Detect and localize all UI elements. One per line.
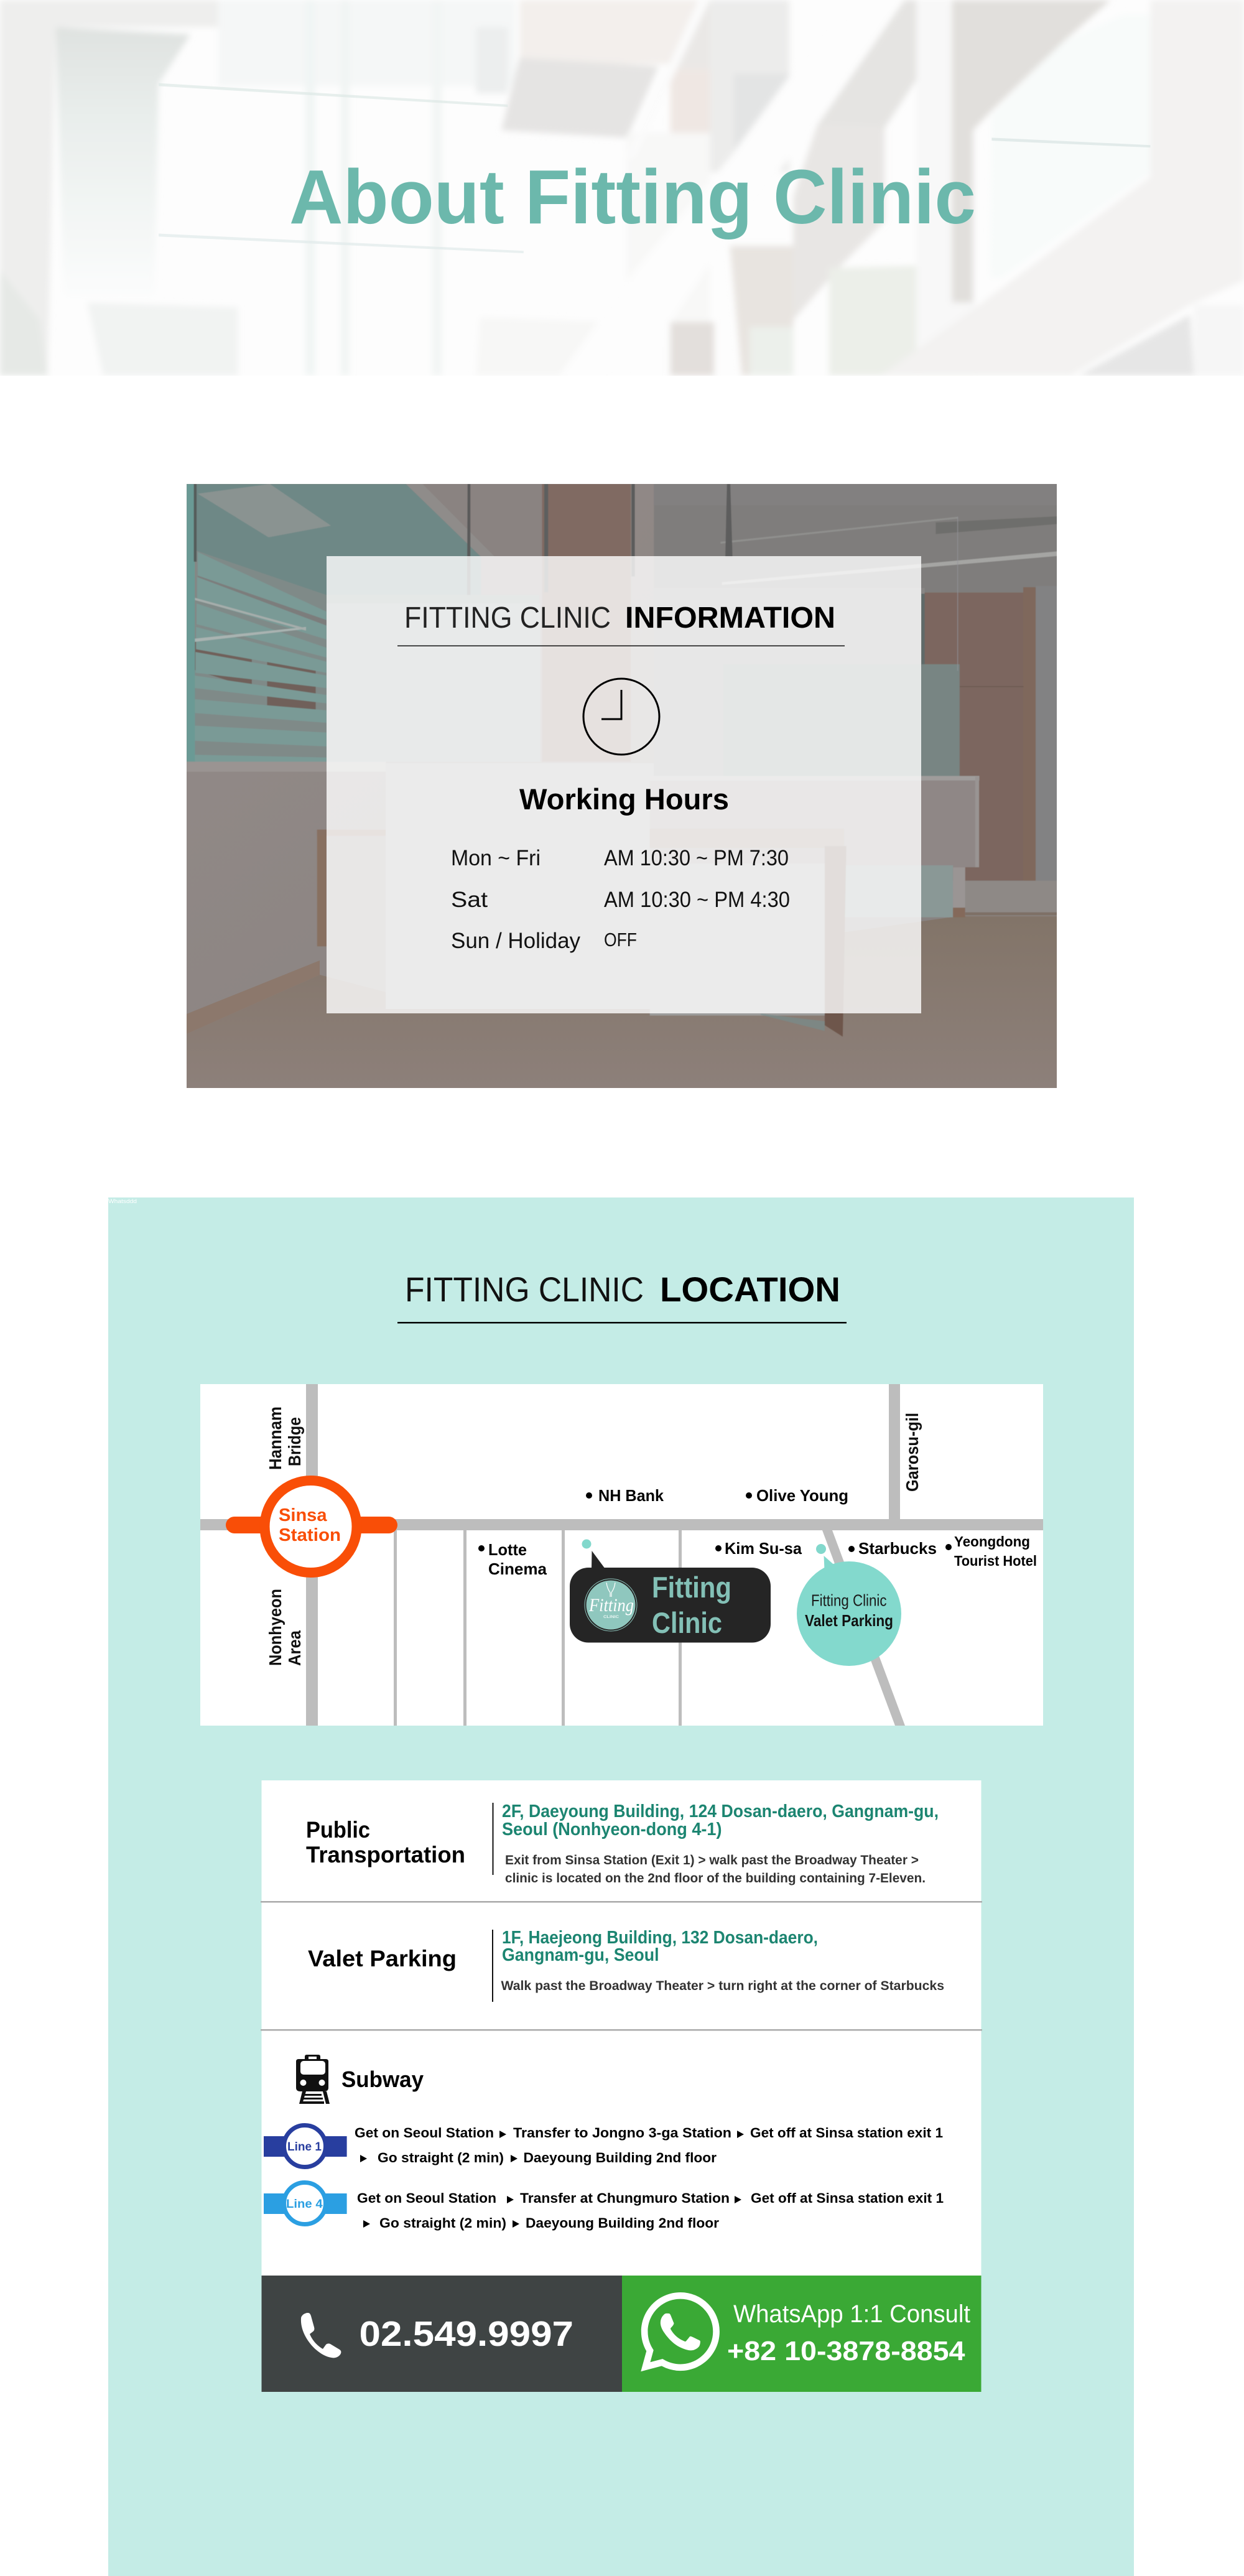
valet parking row [308,1928,944,2002]
subway section [264,2055,944,2231]
Line 4 badge: Line 4 [286,2198,323,2211]
reception photo background [187,484,1057,1088]
landmark labels: Olive Young [756,1486,848,1505]
icon: clock [583,679,659,755]
Line 1 directions: Get on Seoul Station [355,2125,494,2141]
working hours table: AM 10:30 ~ PM 4:30 [604,888,790,912]
valet parking row: Walk past the Broadway Theater > turn right at the corner of Starbucks [501,1979,944,1993]
working hours table: Sun / Holiday [451,929,580,953]
Line 4 directions: Daeyoung Building 2nd floor [526,2215,719,2231]
Line 4 directions: Go straight (2 min) [379,2215,506,2231]
public transportation row: Exit from Sinsa Station (Exit 1) > walk past the Broadway Theater > [505,1853,919,1867]
rotated road labels: Garosu-gil [903,1413,922,1492]
information heading: FITTING CLINIC [404,602,611,635]
clinic location callout: Fitting [652,1571,731,1604]
subway section: Subway [341,2067,424,2092]
rotated road labels: Nonhyeon [266,1589,285,1666]
rotated road labels: Area [285,1630,304,1666]
valet parking row: Gangnam-gu, Seoul [502,1945,659,1965]
landmark labels: NH Bank [598,1486,664,1505]
public transportation row: 2F, Daeyoung Building, 124 Dosan-daero, Gangnam-gu, [502,1802,939,1821]
working hours table: AM 10:30 ~ PM 7:30 [604,846,789,870]
Line 4 directions: Get off at Sinsa station exit 1 [751,2190,944,2206]
Line 4 directions [357,2190,944,2231]
Line 1 directions [355,2125,943,2165]
Line 4 badge [264,2182,347,2225]
working hours table: OFF [604,929,637,951]
landmark labels: Starbucks [858,1539,937,1558]
Sinsa Station marker: Station [279,1525,341,1545]
valet parking row: Valet Parking [308,1946,457,1971]
panel: clinic location [108,1197,1134,2576]
map roads [200,1384,1043,1726]
public transportation row: Public [306,1817,370,1843]
hero banner [0,0,1244,376]
public transportation row: clinic is located on the 2nd floor of the building containing 7-Eleven. [505,1871,926,1886]
information heading [397,602,845,646]
Sinsa Station marker [226,1481,397,1573]
icon: clinic logo [585,1579,637,1631]
icon: subway train [296,2055,330,2104]
small corner text: Whatsddd [108,1198,137,1204]
Line 1 directions: Transfer to Jongno 3-ga Station [513,2125,731,2141]
Line 1 directions: Get off at Sinsa station exit 1 [750,2125,943,2141]
landmark labels: Tourist Hotel [954,1553,1037,1569]
Line 4 directions: Get on Seoul Station [357,2190,496,2206]
icon: clinic logo: CLINIC [603,1616,620,1619]
working hours heading: Working Hours [519,783,729,816]
directions card [261,1780,982,2276]
public transportation row: Transportation [306,1842,465,1867]
reception desk front [386,830,649,1009]
WhatsApp contact bar [622,2276,982,2392]
landmark labels: Cinema [488,1560,547,1578]
landmark labels [478,1486,1037,1578]
Line 1 directions: Daeyoung Building 2nd floor [524,2150,717,2165]
WhatsApp consult label: WhatsApp 1:1 Consult [733,2300,970,2328]
Sinsa Station marker: Sinsa [279,1505,327,1525]
hero title: About Fitting Clinic [289,155,976,240]
Line 1 badge [264,2125,347,2167]
clinic location callout [570,1539,771,1642]
Line 1 directions: Go straight (2 min) [378,2150,504,2165]
icon: WhatsApp [641,2292,720,2371]
icon: clinic logo: Fitting [588,1595,634,1616]
valet parking callout [797,1544,901,1666]
panel: clinic information [187,484,1057,1088]
working hours table: Sat [451,888,488,912]
clinic location callout: Clinic [652,1606,722,1639]
Line 4 directions: Transfer at Chungmuro Station [520,2190,730,2206]
icon: phone [301,2313,341,2358]
phone contact bar [261,2276,622,2392]
valet parking callout: Valet Parking [805,1611,893,1630]
rotated road labels: Bridge [285,1417,304,1466]
information heading: INFORMATION [625,602,835,635]
WhatsApp number: +82 10-3878-8854 [727,2336,965,2366]
valet parking row: 1F, Haejeong Building, 132 Dosan-daero, [502,1928,818,1948]
landmark labels: Yeongdong [954,1533,1030,1550]
translucent information card [327,556,921,1013]
landmark labels: Lotte [488,1540,527,1559]
public transportation row [306,1802,939,1886]
valet parking callout: Fitting Clinic [811,1591,887,1610]
hero photo background [0,0,1244,376]
location heading: LOCATION [660,1270,840,1309]
Line 1 badge: Line 1 [287,2141,322,2154]
rotated road labels [266,1407,922,1666]
public transportation row: Seoul (Nonhyeon-dong 4-1) [502,1820,722,1839]
location background [108,1197,1134,2576]
location map [200,1384,1043,1726]
working hours table: Mon ~ Fri [451,846,541,870]
location heading: FITTING CLINIC [405,1270,644,1309]
location heading [397,1270,847,1324]
working hours table [451,846,790,953]
phone number: 02.549.9997 [360,2314,573,2354]
landmark labels: Kim Su-sa [725,1539,802,1558]
rotated road labels: Hannam [266,1407,285,1470]
